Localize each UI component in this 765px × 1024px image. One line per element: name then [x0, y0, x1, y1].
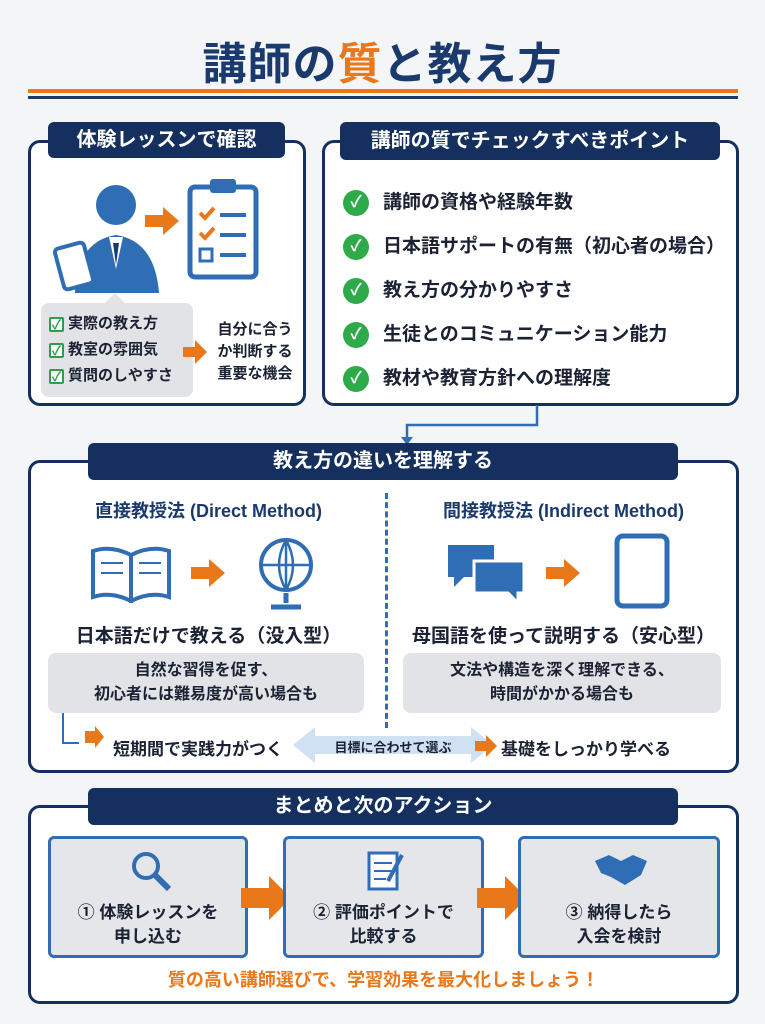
bottom comparison row: 目標に合わせて選ぶ: [334, 740, 452, 755]
bottom comparison row: 基礎をしっかり学べる: [501, 740, 671, 759]
direct note: 初心者には難易度が高い場合も: [94, 686, 318, 703]
conclusion text: か判断する: [217, 343, 292, 360]
step 2: 比較する: [350, 927, 418, 946]
checklist box: 実際の教え方: [68, 315, 158, 332]
step 3: 入会を検討: [576, 927, 662, 946]
bottom comparison row: 短期間で実践力がつく: [113, 740, 283, 759]
header: quality: 講師の質でチェックすべきポイント: [371, 130, 689, 152]
icon: clipboard: [188, 179, 258, 280]
checklist box: 教室の雰囲気: [68, 341, 158, 358]
direct note: 自然な習得を促す、: [135, 662, 277, 679]
indirect method: [412, 501, 715, 647]
step 2: ② 評価ポイントで: [313, 903, 454, 922]
step 1: ① 体験レッスンを: [78, 903, 218, 922]
indirect note: 文法や構造を深く理解できる、: [450, 662, 674, 679]
panel: methods: [28, 460, 739, 773]
panel: summary: [28, 805, 739, 1004]
panel: quality points: 教え方の分かりやすさ: [383, 280, 573, 301]
arrow: [183, 340, 207, 364]
step 2: [283, 836, 484, 958]
conclusion text: 重要な機会: [217, 365, 292, 382]
panel: quality points: ✓: [350, 326, 362, 343]
header: methods: 教え方の違いを理解する: [273, 450, 493, 472]
panel: quality points: ✓: [350, 194, 362, 211]
header: methods: [88, 443, 678, 480]
panel: quality points: ✓: [350, 238, 362, 255]
panel: quality points: 日本語サポートの有無（初心者の場合）: [383, 236, 725, 257]
closing message: 質の高い講師選びで、学習効果を最大化しましょう！: [168, 970, 599, 990]
direct method: [76, 501, 341, 647]
icon: teacher: [53, 185, 159, 293]
panel: quality points: 講師の資格や経験年数: [383, 192, 573, 213]
conclusion text: 自分に合う: [217, 321, 292, 338]
header: summary: まとめと次のアクション: [274, 795, 492, 817]
conclusion text: [217, 321, 292, 382]
direct method: 日本語だけで教える（没入型）: [76, 626, 341, 647]
header: summary: [88, 788, 678, 825]
header: trial: 体験レッスンで確認: [76, 129, 256, 151]
panel: quality points: 教材や教育方針への理解度: [383, 368, 611, 389]
panel: quality points: ✓: [350, 282, 362, 299]
direct note: [48, 653, 364, 713]
panel: quality points: 生徒とのコミュニケーション能力: [383, 324, 667, 345]
header: quality: [340, 122, 720, 160]
step 3: [518, 836, 720, 958]
indirect note: [403, 653, 721, 713]
step 3: ③ 納得したら: [566, 903, 672, 922]
panel: quality points: ✓: [350, 370, 362, 387]
panel: trial lesson: [28, 140, 306, 406]
checklist box: 質問のしやすさ: [68, 367, 173, 384]
direct method: 直接教授法 (Direct Method): [95, 501, 322, 521]
indirect note: 時間がかかる場合も: [490, 686, 634, 703]
indirect method: 間接教授法 (Indirect Method): [443, 501, 684, 521]
step 1: 申し込む: [114, 927, 182, 946]
step 1: [48, 836, 248, 958]
arrow: connector: [401, 405, 538, 443]
panel: quality points: [322, 140, 739, 406]
title: 講師の質と教え方: [202, 40, 562, 89]
checklist box: ✓: [52, 343, 61, 358]
checklist box: ✓: [52, 317, 61, 332]
header: trial: [48, 122, 285, 158]
arrow: [145, 207, 179, 235]
checklist box: [41, 303, 193, 397]
bottom comparison row: [62, 713, 671, 763]
indirect method: 母国語を使って説明する（安心型）: [412, 626, 715, 647]
checklist box: ✓: [52, 369, 61, 384]
